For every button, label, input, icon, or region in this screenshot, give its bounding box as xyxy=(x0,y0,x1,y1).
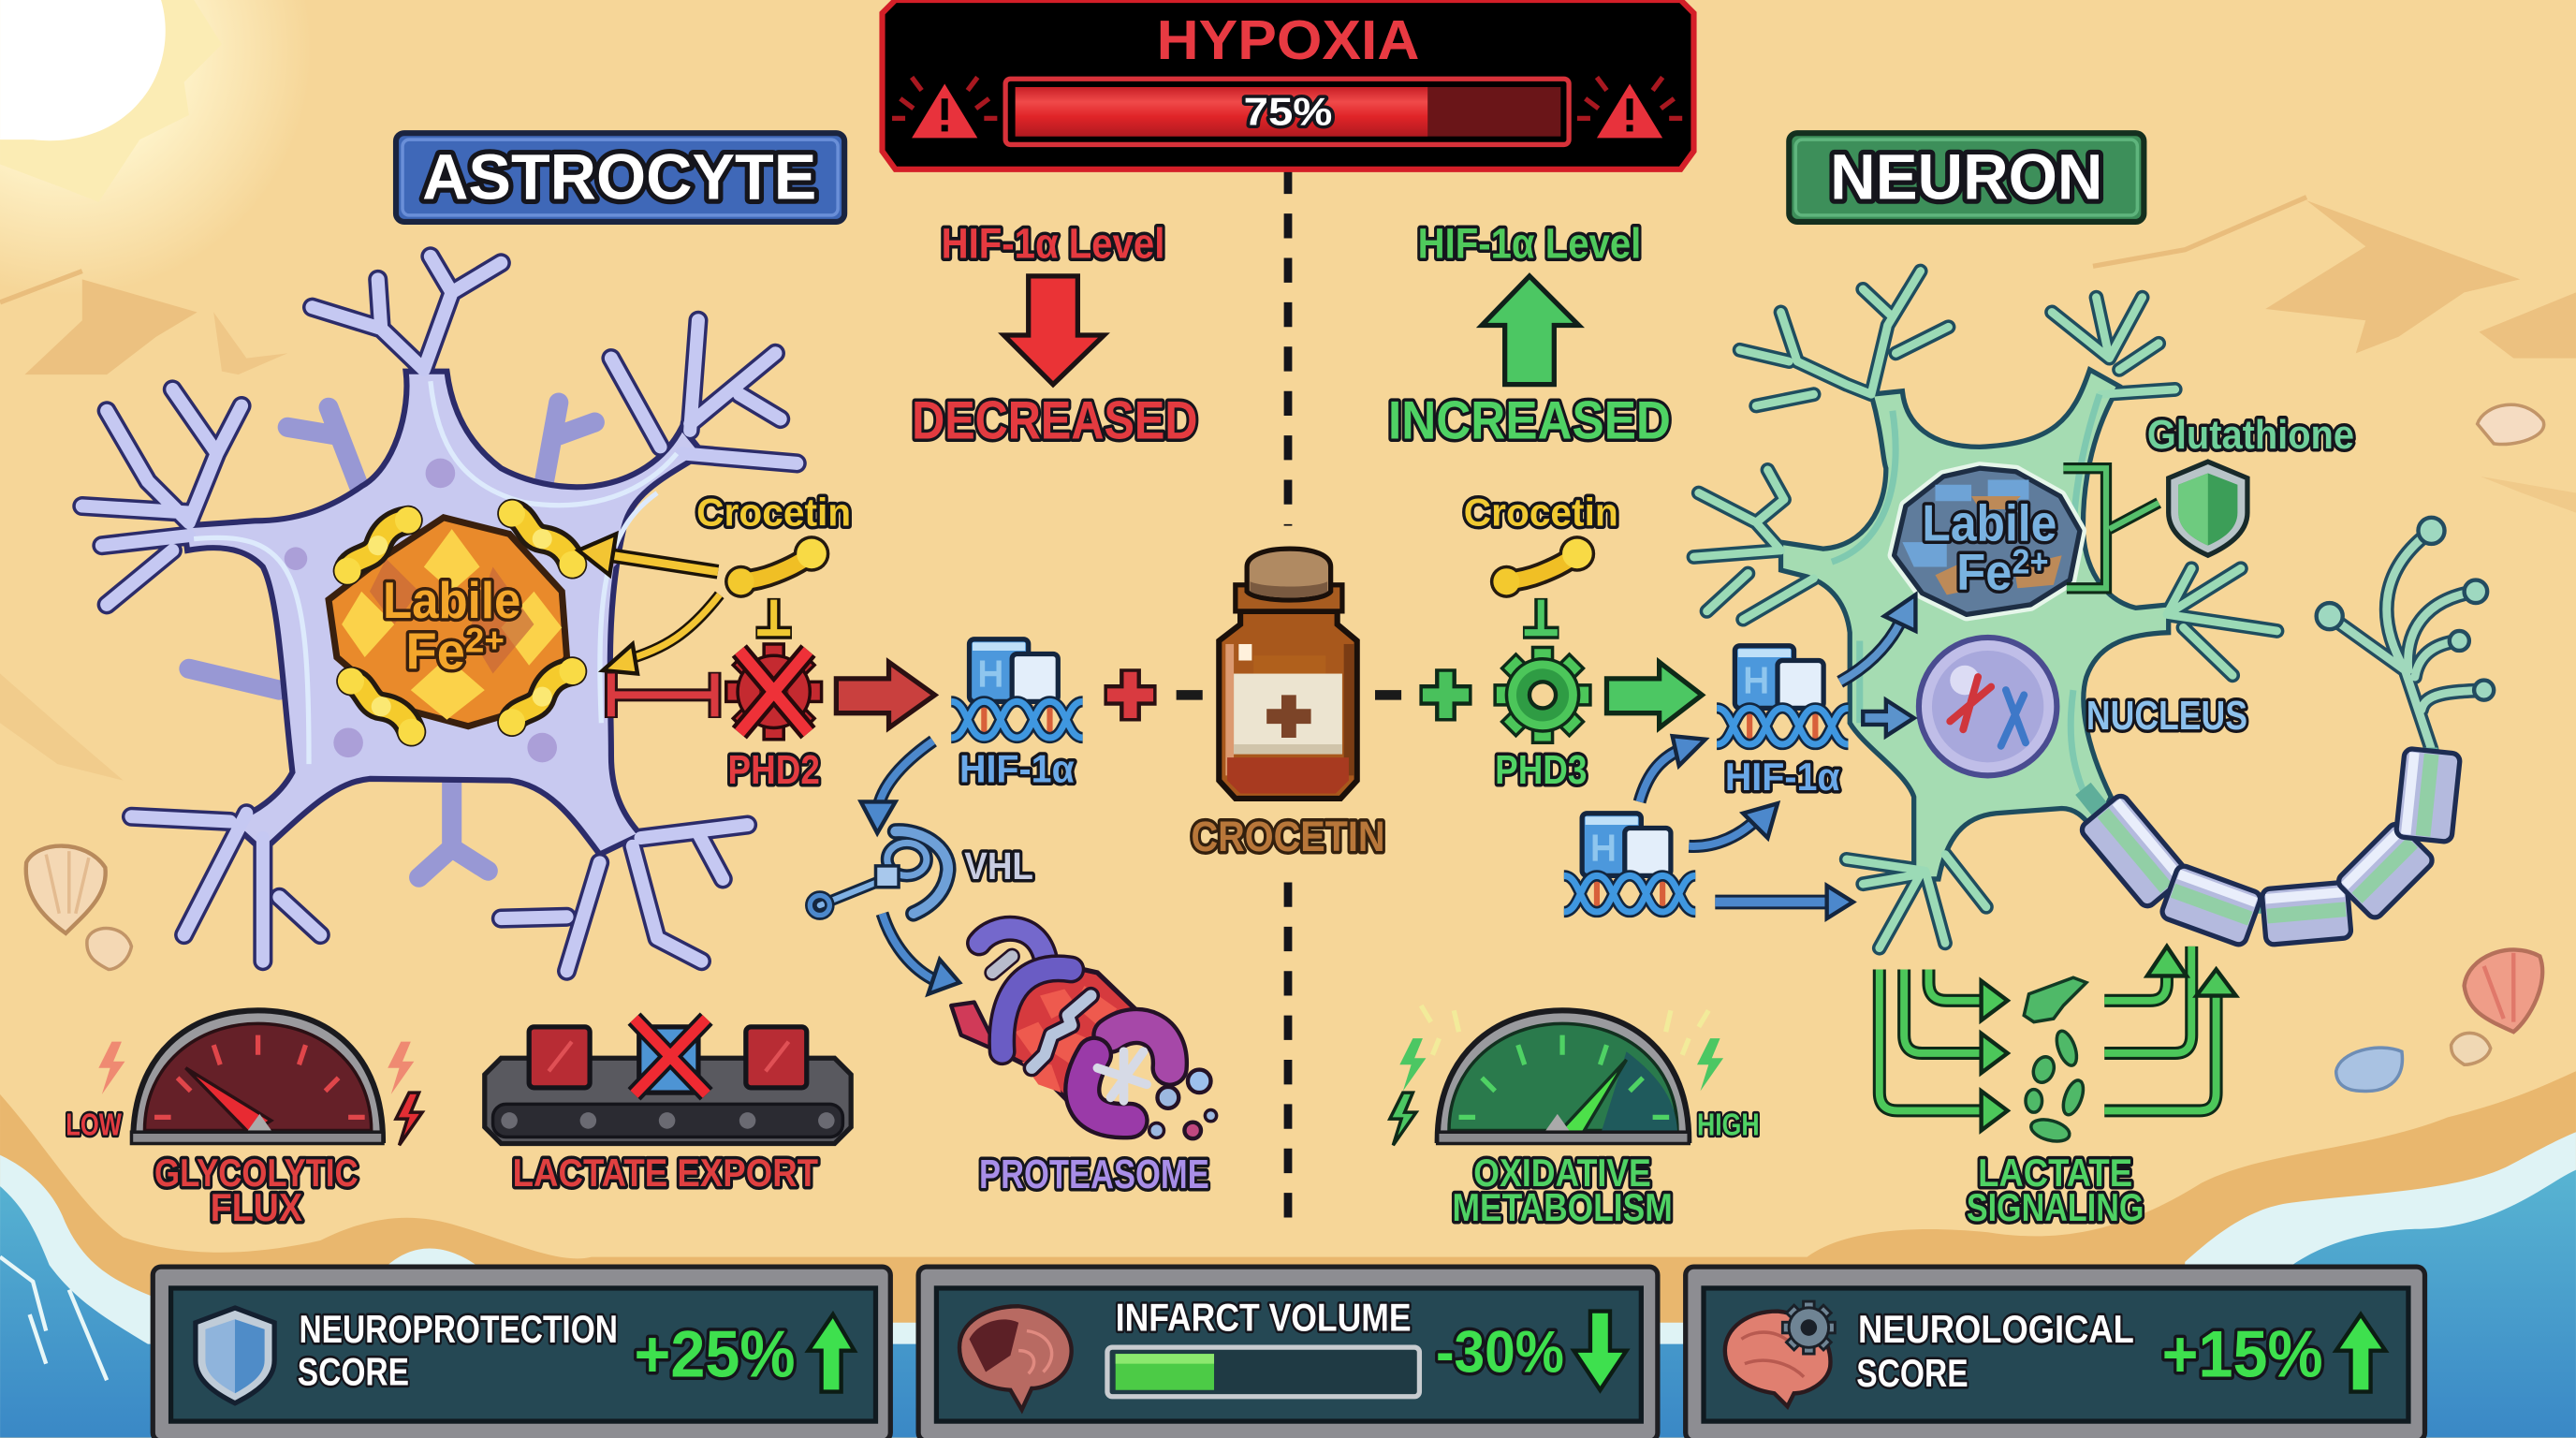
icon: warning left xyxy=(892,77,997,138)
text: Fe2+ neuron: 2+ xyxy=(2012,543,2049,581)
sand dunes xyxy=(0,198,2576,781)
label: VHL: VHL xyxy=(964,844,1033,888)
panel: HIF level increased xyxy=(1388,220,1671,451)
label: infarct volume: INFARCT VOLUME xyxy=(1116,1296,1412,1340)
dash left xyxy=(1177,690,1203,700)
arrow: up green xyxy=(1482,276,1579,385)
arrow: PHD3 to HIF xyxy=(1606,662,1702,727)
arrow: down xyxy=(1573,1312,1627,1390)
arrow: HIF to iron neuron xyxy=(1840,594,1915,682)
label: glycolytic flux xyxy=(154,1151,359,1229)
central dashed divider xyxy=(1286,169,1290,1232)
value: minus 30 percent: -30% xyxy=(1436,1319,1564,1385)
label: HIF level right: HIF-1α Level xyxy=(1418,220,1641,268)
arrow: crocetin to iron lower xyxy=(603,594,720,674)
icon: proteasome xyxy=(951,929,1217,1138)
diagram: lactate signaling arrows xyxy=(1880,946,2236,1145)
panel: neurological score xyxy=(1686,1267,2424,1438)
panel: HIF level decreased xyxy=(912,220,1197,451)
label: PHD2: PHD2 xyxy=(728,747,820,793)
text: neurological score: SCORE xyxy=(1856,1351,1969,1395)
arrow: HIF to VHL xyxy=(861,741,933,833)
icon: HIF-1a left xyxy=(951,639,1083,740)
label: HIF-1a right: HIF-1α xyxy=(1725,755,1840,799)
text: Fe2+ neuron: Fe xyxy=(1956,544,2016,601)
label: PHD3: PHD3 xyxy=(1495,747,1587,793)
inhibition mark crocetin to PHD2 xyxy=(755,598,792,633)
plus red xyxy=(1104,668,1157,721)
value: plus 15 percent: +15% xyxy=(2162,1317,2323,1391)
neuron cell xyxy=(1693,271,2494,948)
label: proteasome: PROTEASOME xyxy=(979,1152,1209,1197)
arrow: crocetin to iron upper xyxy=(578,534,718,575)
crocetin around iron xyxy=(329,495,591,751)
label: oxidative metabolism: OXIDATIVE xyxy=(1473,1151,1651,1195)
icon: crocetin molecule left xyxy=(724,536,829,598)
label: crocetin left: Crocetin xyxy=(696,491,851,535)
label: lactate signaling: LACTATE xyxy=(1978,1151,2132,1195)
label: HIF-1a left: HIF-1α xyxy=(959,746,1075,790)
arrow: up xyxy=(2336,1314,2385,1392)
panel: neuroprotection score xyxy=(153,1267,890,1438)
label: glycolytic flux: FLUX xyxy=(211,1185,302,1229)
label: lactate export: LACTATE EXPORT xyxy=(513,1151,818,1195)
gauge: oxidative metabolism xyxy=(1438,1010,1689,1143)
arrow: HIF to nucleus xyxy=(1863,700,1914,736)
dash right xyxy=(1375,690,1401,700)
text: labile: Labile xyxy=(383,572,520,629)
plus green xyxy=(1419,668,1472,721)
hypoxia progress bar: 75% xyxy=(1244,89,1332,133)
icon: HIF-1a right lower xyxy=(1564,814,1695,914)
label: glutathione: Glutathione xyxy=(2147,412,2354,458)
labile iron neuron xyxy=(1895,468,2080,614)
labile iron astrocyte xyxy=(329,518,567,726)
arrow: lower HIF to upper HIF 2 xyxy=(1689,803,1778,846)
inhibition mark crocetin to PHD3 xyxy=(1523,598,1559,633)
icon: blue shield xyxy=(196,1308,274,1403)
icons: flux sparks xyxy=(98,1042,422,1145)
arrow: HIF to neuron dendrite xyxy=(1715,886,1853,918)
hypoxia progress bar xyxy=(1005,79,1569,144)
lactate molecules xyxy=(2024,977,2087,1145)
icon: VHL anchor xyxy=(810,831,948,916)
icon: brain with gear xyxy=(1725,1301,1835,1406)
icon: lactate conveyor xyxy=(485,1019,851,1143)
arrow: up xyxy=(809,1314,855,1392)
nucleus xyxy=(1919,638,2056,775)
label: glycolytic flux: GLYCOLYTIC xyxy=(154,1151,359,1195)
panel: infarct volume xyxy=(918,1267,1658,1438)
gauge: glycolytic flux xyxy=(131,1010,383,1143)
label: lactate signaling xyxy=(1967,1151,2144,1229)
icon: PHD3 gear xyxy=(1495,647,1590,742)
icon: warning right xyxy=(1577,77,1682,138)
bracket iron shield xyxy=(2063,468,2159,588)
label: low: LOW xyxy=(66,1108,122,1143)
icon: glutathione shield xyxy=(2169,462,2247,555)
icon: HIF-1a right upper xyxy=(1717,646,1848,746)
icons: metabolism sparks xyxy=(1390,1005,1723,1145)
ocean xyxy=(0,1132,2576,1438)
text: Fe2+: 2+ xyxy=(465,622,505,660)
shells xyxy=(26,404,2544,1091)
icon: damaged brain xyxy=(959,1306,1072,1410)
arrow: lower HIF to upper HIF 1 xyxy=(1640,736,1705,801)
heading: astrocyte: ASTROCYTE xyxy=(422,140,816,213)
value: plus 25 percent: +25% xyxy=(634,1317,795,1391)
icon: crocetin bottle xyxy=(1219,549,1357,799)
heading: hypoxia: HYPOXIA xyxy=(1157,8,1419,71)
label: lactate signaling: SIGNALING xyxy=(1967,1185,2144,1229)
inhibition bar PHD2 to iron xyxy=(611,672,714,718)
label: high: HIGH xyxy=(1697,1108,1760,1143)
arrow: VHL to proteasome xyxy=(883,914,959,994)
icon: crocetin molecule right xyxy=(1490,536,1595,598)
text: Fe2+: Fe xyxy=(406,623,465,680)
icon: inhibited PHD2 xyxy=(726,644,822,740)
label: decreased: DECREASED xyxy=(912,391,1197,451)
text: labile neuron: Labile xyxy=(1922,494,2056,551)
arrow: PHD2 to HIF xyxy=(836,662,935,727)
text: neurological score xyxy=(1856,1307,2134,1395)
text: neuroprotection score: SCORE xyxy=(298,1349,409,1393)
wet sand band xyxy=(0,1071,2576,1438)
label: crocetin center: CROCETIN xyxy=(1191,813,1385,860)
heading: neuron: NEURON xyxy=(1830,140,2102,213)
label: increased: INCREASED xyxy=(1388,391,1671,451)
myelin segments xyxy=(2079,748,2461,946)
panel: hypoxia status xyxy=(883,0,1693,169)
text: neurological score: NEUROLOGICAL xyxy=(1858,1307,2134,1351)
text: neuroprotection score: NEUROPROTECTION xyxy=(299,1307,618,1351)
icon: sun xyxy=(0,0,313,296)
label: HIF level left: HIF-1α Level xyxy=(942,220,1164,268)
text: neuroprotection score xyxy=(298,1307,618,1393)
heading: neuron xyxy=(1789,133,2144,222)
label: nucleus: NUCLEUS xyxy=(2086,693,2247,739)
arrow: down red xyxy=(1003,276,1104,385)
astrocyte cell xyxy=(82,257,797,971)
label: oxidative metabolism: METABOLISM xyxy=(1453,1185,1673,1229)
infarct progress bar xyxy=(1107,1347,1419,1397)
label: crocetin right: Crocetin xyxy=(1464,491,1618,535)
label: oxidative metabolism xyxy=(1453,1151,1673,1229)
